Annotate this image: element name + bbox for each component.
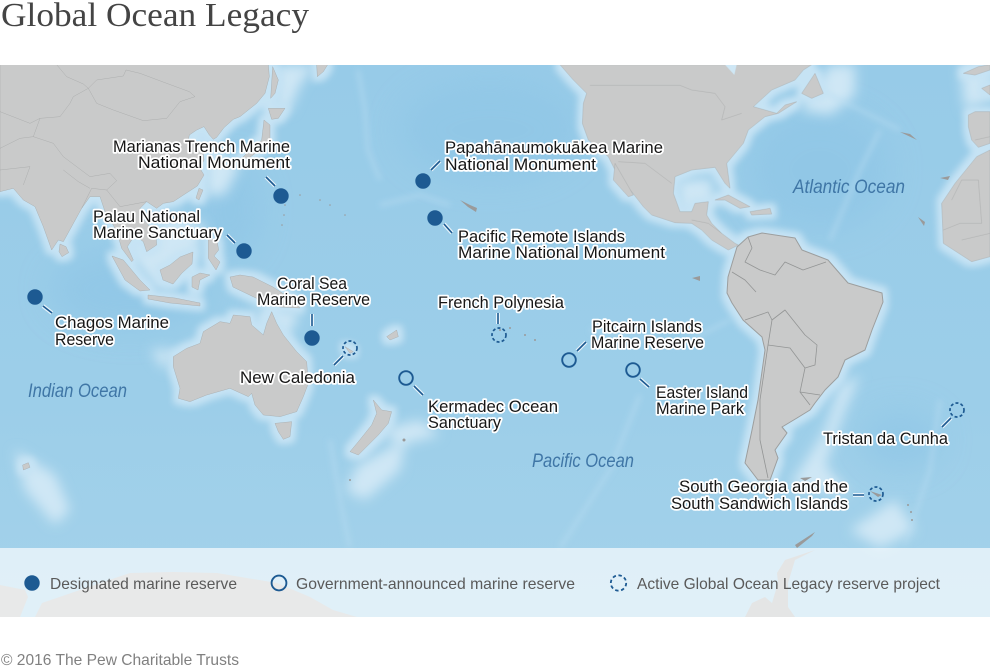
continental shelves	[15, 65, 990, 548]
reserve name labels	[55, 137, 949, 513]
reserve name labels: New Caledonia	[240, 368, 356, 387]
reserve name labels: Reserve	[55, 330, 114, 349]
legend item: active project: Active Global Ocean Legacy reserve project	[637, 576, 941, 593]
seamount ridges	[358, 74, 940, 468]
reserve name labels: Palau National	[93, 207, 200, 226]
reserve name labels: Tristan da Cunha	[823, 429, 949, 448]
land: Borneo	[160, 252, 193, 284]
reserve name labels: Pitcairn Islands	[592, 317, 702, 336]
legend item: government-announced: Government-announced marine reserve	[296, 576, 575, 593]
reserve name labels: Papahānaumokuākea Marine	[445, 138, 663, 157]
reserve name labels: Chagos Marine	[55, 313, 169, 332]
designated reserve markers	[27, 173, 443, 346]
land: Australia and South Pacific	[23, 312, 398, 470]
land: Taiwan and Sri Lanka	[59, 188, 203, 257]
land: Britain and Scandinavia	[963, 65, 990, 95]
Hudson Bay gap	[725, 65, 737, 75]
legend item: designated: Designated marine reserve	[50, 576, 237, 593]
land: New Zealand	[350, 400, 392, 455]
land: Newfoundland	[802, 73, 823, 98]
land: Iberia and Europe	[968, 112, 990, 147]
reserve name labels: South Sandwich Islands	[671, 494, 848, 513]
country borders	[590, 85, 990, 240]
land: North America	[560, 65, 990, 262]
tiny islands	[281, 132, 950, 548]
reserve name labels: Marine Reserve	[591, 333, 704, 352]
coastal shelf glow	[0, 65, 990, 480]
reserve name labels: Marine National Monument	[458, 243, 665, 262]
reserve name labels: Marianas Trench Marine	[113, 137, 290, 156]
land: West Africa	[942, 150, 990, 262]
reserve name labels: Marine Park	[656, 399, 744, 418]
reserve name labels: Kermadec Ocean	[428, 397, 558, 416]
land: New Guinea	[230, 275, 300, 308]
land: Kamchatka and Sakhalin	[317, 65, 328, 77]
reserve name labels: French Polynesia	[438, 293, 565, 312]
land: Tasmania	[275, 422, 292, 439]
ocean name labels: Pacific Ocean	[532, 451, 634, 472]
reserve name labels: National Monument	[138, 153, 290, 172]
reserve name labels: Marine Sanctuary	[93, 223, 222, 242]
land: Sulawesi	[192, 273, 210, 290]
land: Sumatra	[112, 256, 150, 291]
ocean name labels: Indian Ocean	[28, 381, 127, 402]
legend	[24, 575, 941, 593]
land: Fiji and New Caledonia	[345, 330, 398, 353]
reserve name labels: Coral Sea	[277, 274, 347, 293]
land: Kerguelen	[23, 463, 30, 470]
land: Java and Lesser Sunda	[148, 295, 200, 306]
leader lines	[43, 161, 951, 495]
land: South America	[727, 233, 883, 480]
land: Baja California	[613, 163, 633, 197]
legend band	[0, 548, 990, 617]
all land	[0, 65, 990, 480]
Asia borders	[0, 65, 195, 208]
reserve name labels: Marine Reserve	[257, 290, 370, 309]
government-announced reserve markers	[399, 353, 640, 385]
active project markers	[343, 328, 964, 501]
reserve name labels: Easter Island	[656, 383, 748, 402]
land: Cuba and Hispaniola	[715, 195, 772, 215]
land: Philippines	[208, 238, 220, 270]
land: Asia	[0, 65, 328, 308]
land: Japan	[240, 108, 285, 160]
South America borders	[732, 237, 826, 478]
ocean depth shading	[83, 276, 921, 460]
reserve name labels: Sanctuary	[428, 413, 501, 432]
reserve name labels: National Monument	[445, 155, 596, 174]
ocean name labels	[28, 177, 905, 472]
ocean name labels: Atlantic Ocean	[792, 177, 905, 198]
reserve name labels: Pacific Remote Islands	[458, 227, 625, 246]
reserve name labels: South Georgia and the	[679, 477, 848, 496]
